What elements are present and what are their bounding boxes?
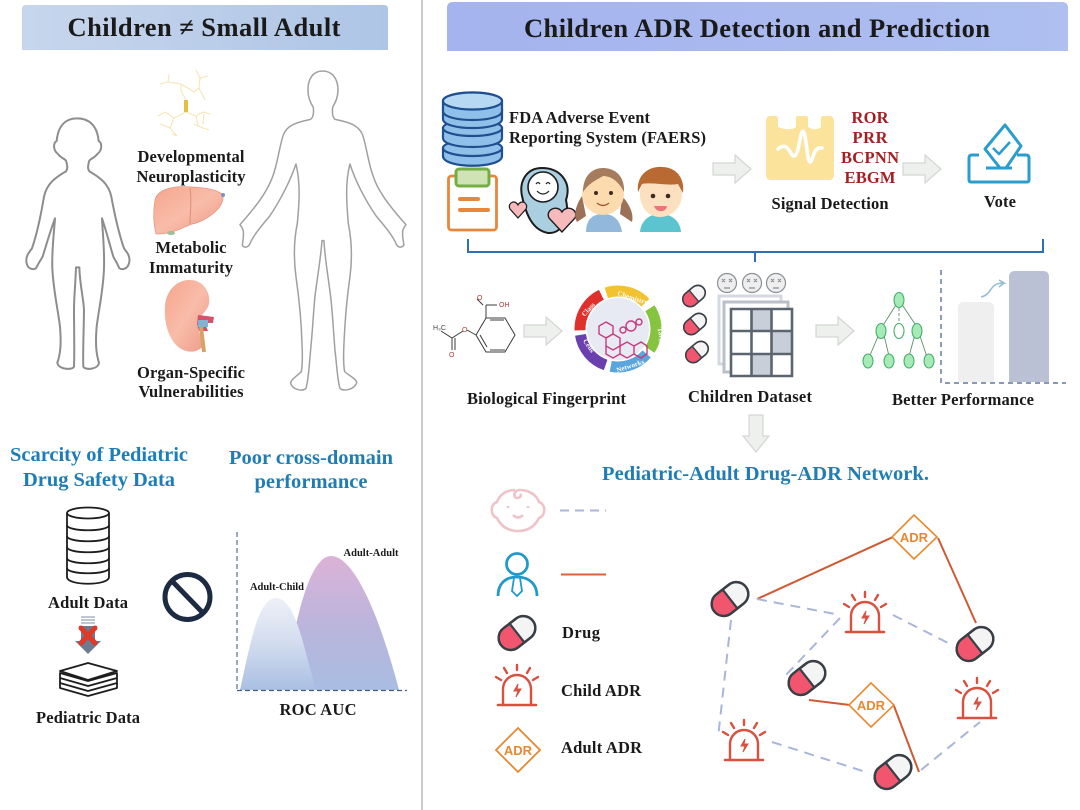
label: Pediatric Data: Pediatric Data: [36, 708, 140, 727]
icon: kidney: [165, 280, 214, 352]
icon: signal detection: [766, 116, 834, 180]
node: adult ADR 1: [892, 515, 937, 559]
icon: aspirin molecule: [433, 295, 515, 359]
icon: aspirin molecule: H₃C: [433, 325, 446, 332]
icon: vote box: [969, 125, 1029, 182]
label: Organ-Specific Vulnerabilities: [137, 363, 245, 401]
label: Metabolic Immaturity: [149, 238, 234, 277]
network diagram: [707, 515, 998, 794]
icon: adult person: [498, 554, 537, 596]
icon: liver: [154, 187, 225, 235]
label: Adult-Adult: Adult-Adult: [344, 548, 399, 559]
panel: data scarcity and domain performance: [10, 444, 407, 727]
legend: child dashed edge: [492, 490, 606, 531]
list: signal detection methods: [841, 108, 899, 187]
label: Organ-Specific Vulnerabilities: Vulnerabilities: [138, 382, 244, 401]
arrow: dataset to model: [816, 317, 854, 345]
heading: Poor cross-domain performance: [229, 447, 394, 493]
heading: Poor cross-domain performance: performance: [254, 471, 368, 493]
label: Signal Detection: Signal Detection: [772, 194, 888, 213]
node: drug 1: [707, 577, 753, 621]
label: Biological Fingerprint: Biological Fingerprint: [467, 389, 626, 408]
label: Adult-Child: Adult-Child: [250, 582, 304, 593]
legend: adult ADR: [496, 728, 643, 772]
node: child ADR 2: [956, 678, 998, 718]
icon: pediatric data stack: [60, 663, 117, 696]
arrow: signal detection to vote: [903, 155, 941, 183]
label: Children Dataset: Children Dataset: [688, 387, 812, 406]
arrow: down to network: [743, 415, 769, 452]
heading: Scarcity of Pediatric Drug Safety Data: [10, 444, 188, 491]
label: Developmental Neuroplasticity: Neuroplasticity: [136, 167, 246, 186]
heading: Scarcity of Pediatric Drug Safety Data: Drug Safety Data: [23, 469, 175, 491]
node: drug 4: [870, 750, 916, 794]
legend: adult ADR: Adult ADR: [561, 738, 643, 757]
chart: better performance bars: [941, 270, 1066, 383]
label: Vote: Vote: [984, 192, 1016, 211]
heading: Pediatric-Adult Drug-ADR Network: Pediatric-Adult Drug-ADR Network.: [602, 463, 929, 485]
list: signal detection methods: ROR: [852, 108, 890, 127]
icon: children dataset grid: [719, 296, 792, 376]
icon: biological fingerprint wheel: Targets: [655, 327, 669, 351]
node: drug 3: [784, 656, 830, 700]
icon: neuron: [158, 70, 210, 136]
icon: decision tree: [863, 292, 934, 368]
label: ROC AUC: ROC AUC: [280, 700, 356, 719]
icon: girl: [575, 168, 633, 232]
icon: adverse faces: [718, 274, 786, 292]
icon: biological fingerprint wheel: Chemistry: [616, 289, 649, 307]
icon: biological fingerprint wheel: Networks: [615, 358, 646, 374]
label: FDA Adverse Event Reporting System: FDA Adverse Event: [509, 108, 650, 127]
legend: adult ADR: ADR: [504, 743, 533, 758]
label: Adult Data: Adult Data: [48, 593, 128, 612]
icon: aspirin molecule: O: [449, 352, 455, 359]
chart: ROC AUC distributions: [237, 532, 407, 719]
label: Organ-Specific Vulnerabilities: Organ-Specific: [137, 363, 245, 382]
list: signal detection methods: PRR: [852, 128, 889, 147]
divider: [421, 0, 423, 810]
arrow: FAERS to signal detection: [713, 155, 751, 183]
dashed child edges: [718, 599, 980, 773]
heading banner: Children ADR Detection and Prediction: [447, 2, 1068, 51]
panel: children ADR detection and prediction: [433, 2, 1068, 794]
icon: FAERS database: [443, 92, 502, 166]
icon: clipboard report: [448, 169, 496, 230]
heading banner: Children ADR Detection and Prediction: Children ADR Detection and Prediction: [524, 13, 990, 43]
icon: baby face: [492, 490, 544, 531]
icon: three pills: [680, 282, 711, 366]
label: FDA Adverse Event Reporting System: Reporting System (FAERS): [509, 128, 706, 147]
label: Metabolic Immaturity: Immaturity: [149, 258, 234, 277]
icon: aspirin molecule: O: [477, 295, 483, 302]
list: signal detection methods: EBGM: [844, 168, 896, 187]
icon: aspirin molecule: O: [462, 327, 468, 334]
curve: Adult-Adult: [296, 556, 399, 690]
icon: adult body outline: [240, 71, 406, 390]
legend: adult solid edge: [498, 554, 606, 596]
legend: child ADR: Child ADR: [561, 681, 642, 700]
icon: child body outline: [26, 118, 129, 369]
label: Better Performance: Better Performance: [892, 390, 1034, 409]
curve: Adult-Child: [240, 598, 316, 690]
legend: child ADR: [496, 665, 642, 705]
legend: drug: [494, 611, 601, 655]
node: adult ADR 2: ADR: [857, 698, 886, 713]
solid adult edges: [757, 537, 976, 772]
node: child ADR 1: [844, 592, 886, 632]
node: child ADR 3: [723, 720, 765, 760]
icon: adult data cylinder: [67, 508, 109, 584]
icon: biological fingerprint wheel: Cells: [581, 338, 596, 354]
panel: children vs small adult: [22, 5, 406, 401]
node: adult ADR 2: [849, 683, 894, 727]
icon: prohibited sign: [165, 574, 210, 620]
icon: biological fingerprint wheel: Class: [580, 301, 597, 318]
arrow: molecule to fingerprint: [524, 317, 562, 345]
heading: Scarcity of Pediatric Drug Safety Data: Scarcity of Pediatric: [10, 444, 188, 466]
icon: swaddled baby: [509, 168, 576, 233]
heading: Poor cross-domain performance: Poor cross-domain: [229, 447, 394, 469]
legend: drug: Drug: [562, 623, 601, 642]
list: signal detection methods: BCPNN: [841, 148, 899, 167]
label: Developmental Neuroplasticity: [136, 147, 246, 186]
label: FDA Adverse Event Reporting System: [509, 108, 706, 147]
icon: biological fingerprint wheel: [564, 275, 672, 383]
icon: blocked arrow: [75, 617, 101, 654]
label: Metabolic Immaturity: Metabolic: [156, 238, 226, 257]
heading banner: Children not equal small adult: [22, 5, 388, 50]
label: Developmental Neuroplasticity: Developmental: [138, 147, 245, 166]
bracket connector: [468, 239, 1043, 262]
node: adult ADR 1: ADR: [900, 530, 929, 545]
legend: [492, 490, 643, 772]
heading banner: Children not equal small adult: Children ≠ Small Adult: [68, 12, 341, 42]
icon: aspirin molecule: OH: [499, 302, 510, 309]
icon: boy: [638, 167, 683, 232]
arrow: improvement: [981, 280, 1004, 297]
node: drug 2: [952, 622, 998, 666]
